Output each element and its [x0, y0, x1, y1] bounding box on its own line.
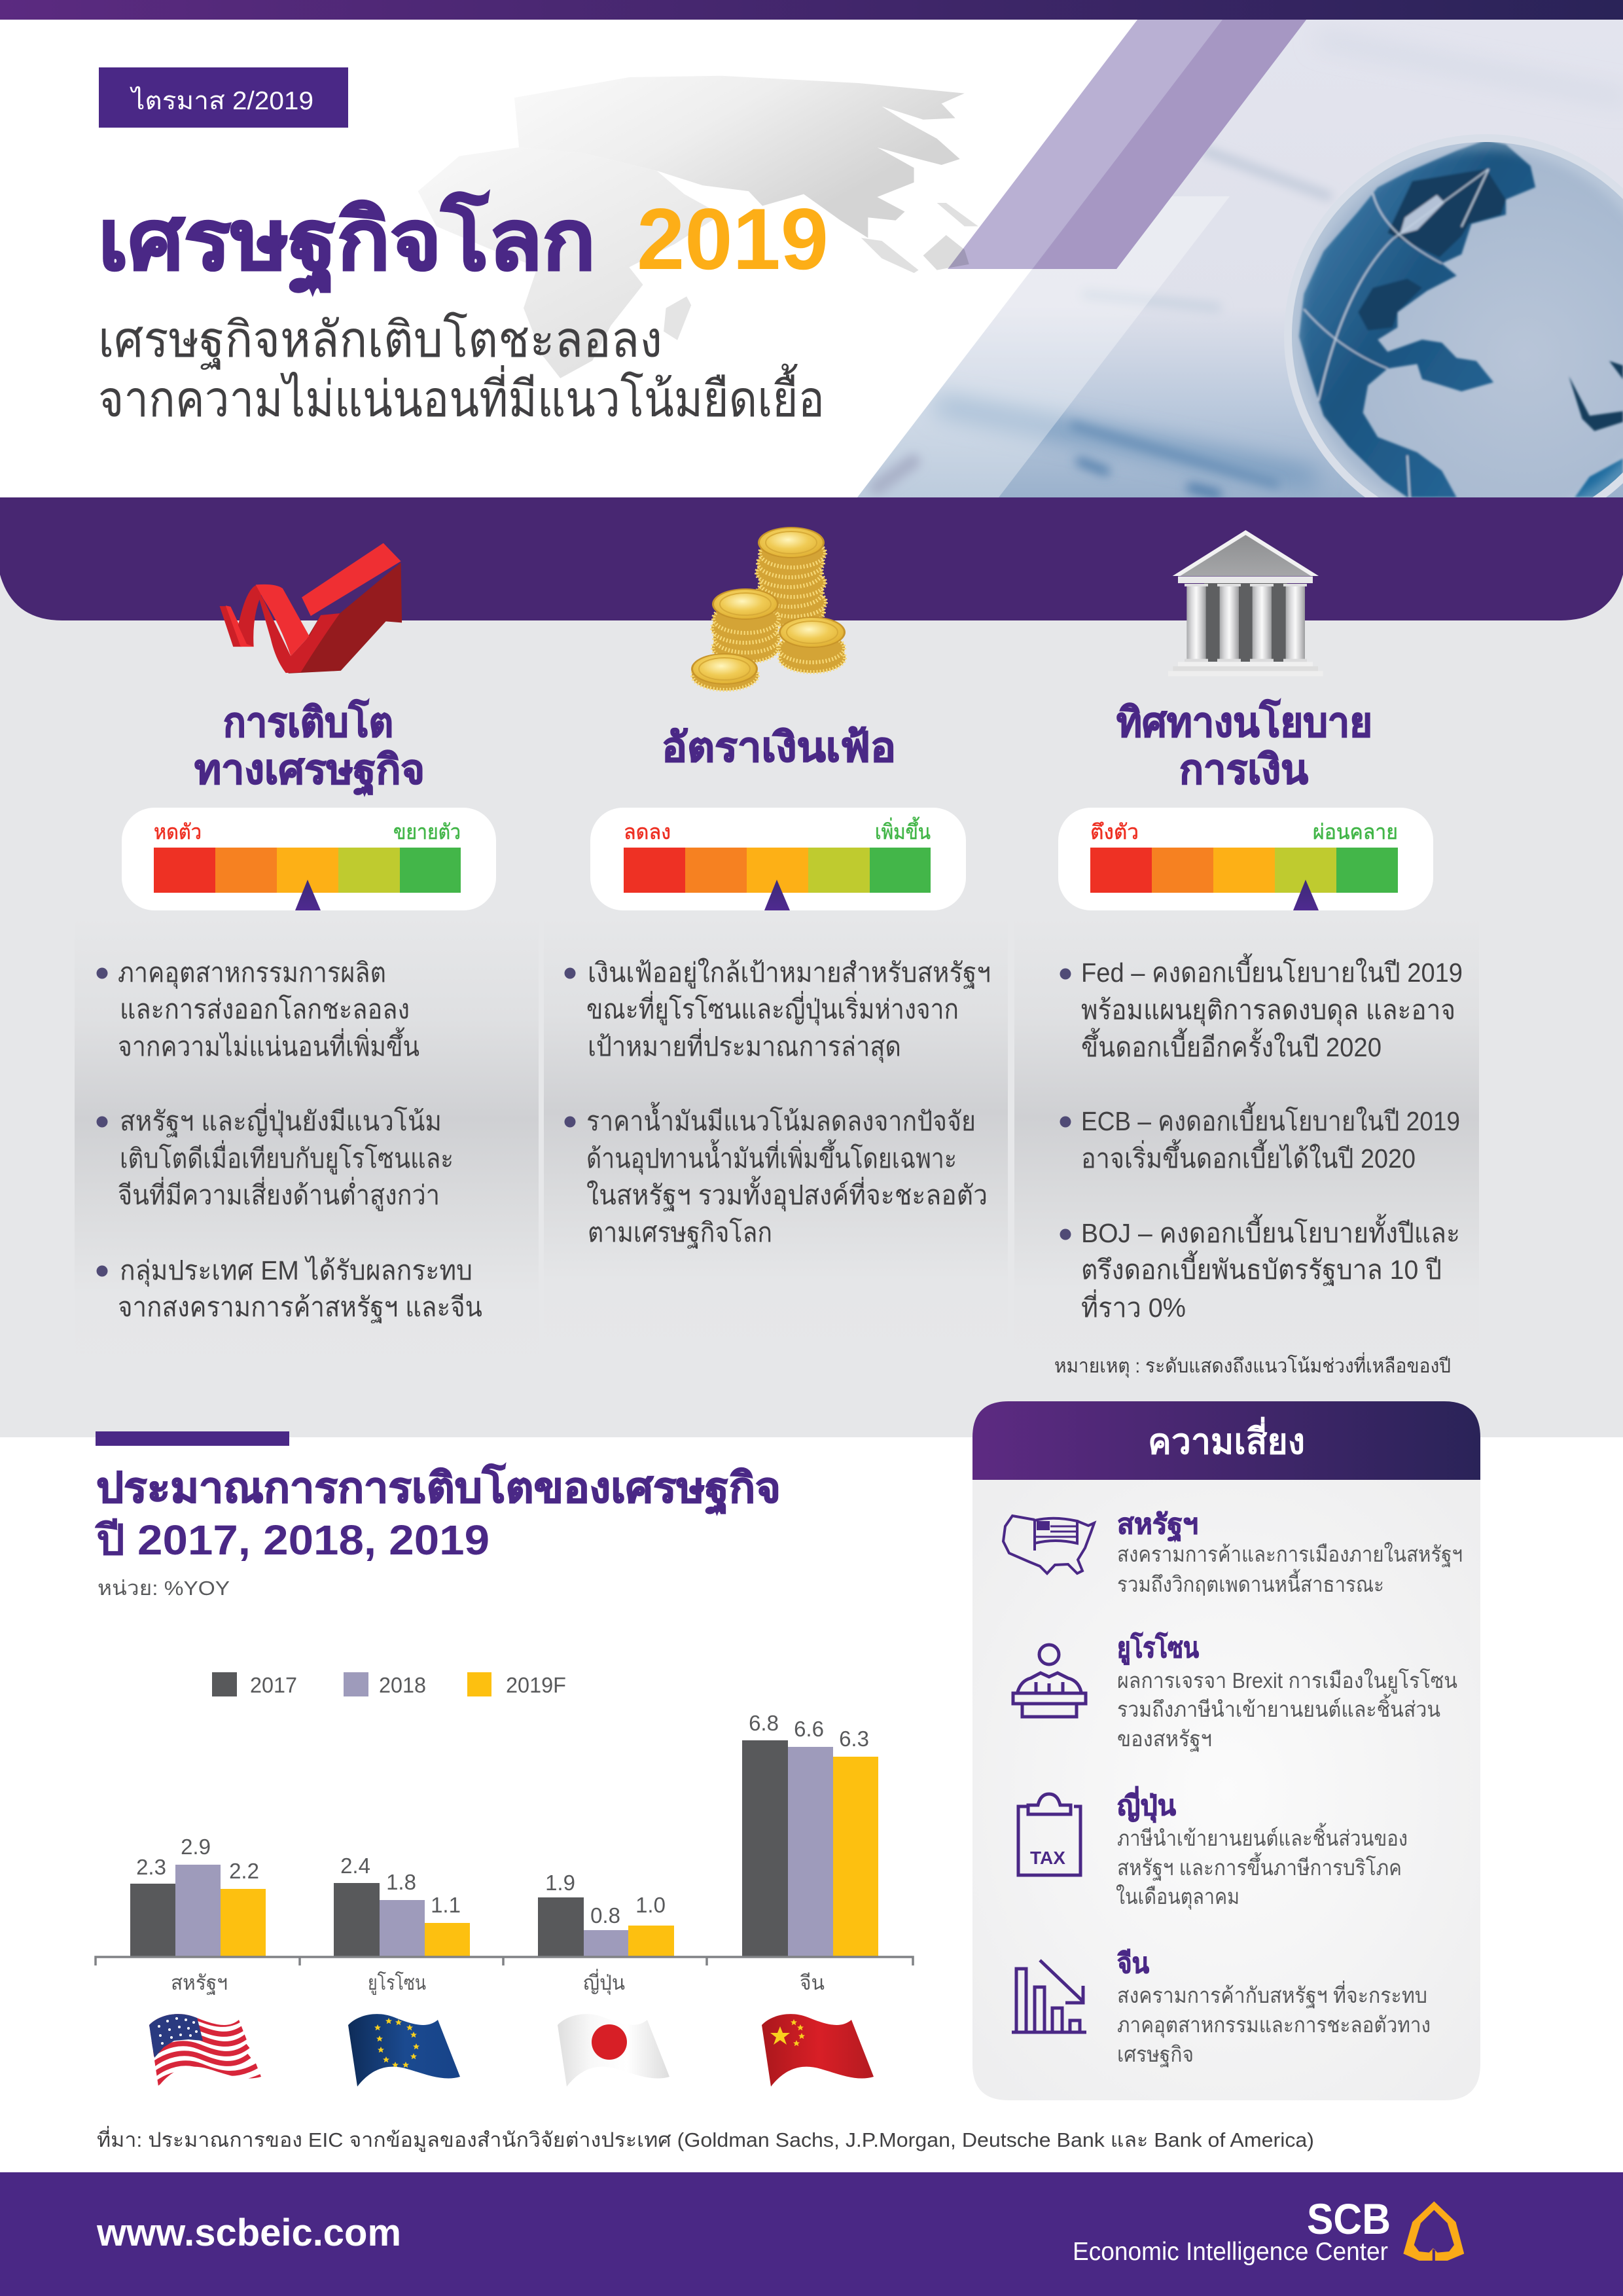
gauge: inflation: ลดลง	[624, 820, 671, 844]
category labels: จีน	[800, 1971, 825, 1994]
bars: USA	[130, 1835, 266, 1957]
quarter badge	[99, 67, 348, 128]
text block: monetary policy bullets: ตรึงดอกเบี้ยพันธบัตรรัฐบาล 10 ปี	[1081, 1250, 1442, 1286]
risk: Japan	[1018, 1786, 1408, 1910]
world map watermark	[418, 76, 978, 378]
risk: Eurozone	[1013, 1632, 1457, 1752]
icon: SCB bodhi leaf logo	[1403, 2201, 1464, 2261]
risk: USA	[1003, 1509, 1463, 1596]
subtitle	[98, 312, 825, 427]
bars: Eurozone	[334, 1854, 470, 1957]
heading: inflation: อัตราเงินเฟ้อ	[662, 725, 896, 770]
text block: growth bullets	[97, 958, 482, 1323]
heading: growth forecast	[94, 1463, 781, 1564]
text block: growth bullets: จีนที่มีความเสี่ยงด้านต่ำสูงกว่า	[118, 1177, 440, 1211]
gauge: monetary policy	[1058, 808, 1433, 910]
footer	[0, 2172, 1623, 2296]
category labels: ญี่ปุ่น	[583, 1969, 625, 1996]
icon: tax clipboard	[1018, 1794, 1080, 1875]
risk: China	[1012, 1948, 1431, 2068]
bars: China: 6.8	[749, 1711, 779, 1735]
text block: inflation bullets: ตามเศรษฐกิจโลก	[588, 1217, 772, 1249]
heading: economic growth: การเติบโต	[223, 698, 393, 745]
icon: red growth arrow	[220, 543, 402, 673]
risk: Eurozone: ของสหรัฐฯ	[1117, 1727, 1212, 1752]
title: 2019	[637, 191, 829, 288]
heading: growth forecast: ปี 2017, 2018, 2019	[94, 1516, 490, 1564]
bars: Eurozone: 1.1	[431, 1893, 461, 1917]
heading: monetary policy: ทิศทางนโยบาย	[1116, 698, 1372, 745]
text block: inflation bullets: ด้านอุปทานน้ำมันที่เพิ่มขึ้นโดยเฉพาะ	[586, 1139, 957, 1175]
flag: China	[762, 2014, 874, 2087]
text block: monetary policy bullets: Fed – คงดอกเบี้ยนโยบายในปี 2019	[1081, 953, 1463, 988]
bars: Japan: 1.9	[545, 1871, 575, 1895]
icon: US map with flag	[1003, 1516, 1094, 1573]
category labels: สหรัฐฯ	[171, 1971, 228, 1995]
footer: www.scbeic.com	[96, 2212, 401, 2254]
text block: growth bullets: จากความไม่แน่นอนที่เพิ่มขึ้น	[118, 1027, 419, 1062]
logo wordmark: Economic Intelligence Center	[1073, 2238, 1388, 2266]
bars: USA: 2.2	[229, 1859, 259, 1883]
photo: globe on financial paper	[851, 20, 1623, 537]
text block: monetary policy bullets: ECB – คงดอกเบี้ยนโยบายในปี 2019	[1081, 1102, 1460, 1136]
bars: Eurozone: 2.4	[340, 1854, 370, 1878]
category labels: ยูโรโซน	[368, 1971, 426, 1995]
quarter badge: ไตรมาส 2/2019	[130, 86, 313, 115]
subtitle: จากความไม่แน่นอนที่มีแนวโน้มยืดเยื้อ	[98, 363, 825, 427]
icon: tax clipboard: TAX	[1030, 1848, 1065, 1868]
subtitle: เศรษฐกิจหลักเติบโตชะลอลง	[98, 312, 662, 370]
bars: USA: 2.3	[136, 1855, 166, 1879]
bars: Japan: 1.0	[635, 1893, 666, 1917]
legend	[212, 1672, 566, 1697]
text block: inflation bullets: ราคาน้ำมันมีแนวโน้มลดลงจากปัจจัย	[586, 1102, 976, 1136]
gauge: growth: ขยายตัว	[393, 820, 461, 844]
flag: USA	[149, 2014, 261, 2086]
risk: Japan: สหรัฐฯ และการขึ้นภาษีการบริโภค	[1117, 1852, 1402, 1881]
gauge: inflation	[590, 808, 966, 910]
text block: inflation bullets	[564, 958, 991, 1249]
heading: monetary policy: การเงิน	[1179, 747, 1308, 793]
risk: Eurozone: ผลการเจรจา Brexit การเมืองในยูโรโซน	[1117, 1668, 1457, 1694]
risk: Eurozone: ยูโรโซน	[1117, 1632, 1199, 1665]
text block: growth bullets: และการส่งออกโลกชะลอลง	[120, 994, 410, 1024]
risk: Japan: ภาษีนำเข้ายานยนต์และชิ้นส่วนของ	[1117, 1823, 1408, 1850]
text block: monetary policy bullets	[1060, 953, 1463, 1323]
heading: economic growth: ทางเศรษฐกิจ	[194, 747, 425, 796]
risk: China: สงครามการค้ากับสหรัฐฯ ที่จะกระทบ	[1117, 1981, 1427, 2009]
title: เศรษฐกิจโลก	[98, 191, 596, 295]
text block: monetary policy bullets: อาจเริ่มขึ้นดอกเบี้ยได้ในปี 2020	[1081, 1139, 1416, 1174]
logo wordmark: SCB	[1307, 2195, 1391, 2243]
text block: monetary policy bullets: ที่ราว 0%	[1081, 1289, 1186, 1323]
category labels	[171, 1969, 825, 1996]
bars: China: 6.3	[839, 1727, 869, 1751]
text block: growth bullets: ภาคอุตสาหกรรมการผลิต	[118, 958, 386, 989]
note: หมายเหตุ : ระดับแสดงถึงแนวโน้มช่วงที่เหลือของปี	[1054, 1352, 1451, 1378]
legend: 2017	[250, 1673, 297, 1697]
risk: USA: สงครามการค้าและการเมืองภายในสหรัฐฯ	[1117, 1542, 1463, 1568]
gauge: monetary policy: ผ่อนคลาย	[1313, 820, 1398, 844]
unit label: หน่วย: %YOY	[98, 1577, 230, 1600]
bars: Japan	[538, 1871, 674, 1957]
icon: central bank building	[1168, 530, 1323, 676]
bar chart	[96, 1711, 913, 1996]
logo wordmark	[1073, 2195, 1391, 2266]
gauge: inflation: เพิ่มขึ้น	[875, 817, 931, 844]
text block: growth bullets: จากสงครามการค้าสหรัฐฯ และจีน	[118, 1292, 482, 1323]
flag: Japan	[558, 2015, 669, 2087]
source note: ที่มา: ประมาณการของ EIC จากข้อมูลของสำนักวิจัยต่างประเทศ (Goldman Sachs, J.P.Morgan, Deutsche Bank และ Bank of America)	[97, 2126, 1314, 2152]
text block: monetary policy bullets: ขึ้นดอกเบี้ยอีกครั้งในปี 2020	[1081, 1028, 1382, 1062]
text block: growth bullets: เติบโตดีเมื่อเทียบกับยูโรโซนและ	[120, 1140, 454, 1175]
text block: inflation bullets: ขณะที่ยูโรโซนและญี่ปุ่นเริ่มห่างจาก	[586, 991, 959, 1026]
bars: China	[742, 1711, 878, 1957]
icon: falling bar chart	[1012, 1960, 1086, 2032]
globe	[1284, 134, 1623, 537]
risk: China: จีน	[1117, 1948, 1149, 1979]
top gradient bar	[0, 0, 1623, 20]
gauge: growth	[122, 808, 496, 910]
legend: 2018	[379, 1673, 426, 1697]
heading: monetary policy	[1116, 698, 1372, 793]
icon: gold coins	[691, 527, 846, 691]
text block: monetary policy bullets: พร้อมแผนยุติการลดงบดุล และอาจ	[1081, 995, 1455, 1026]
lavender diagonal band	[948, 20, 1306, 269]
text block: inflation bullets: เป้าหมายที่ประมาณการล่าสุด	[588, 1028, 901, 1063]
risk: China: เศรษฐกิจ	[1117, 2042, 1194, 2068]
panel: risks: ความเสี่ยง	[1148, 1416, 1305, 1462]
legend: 2019F	[506, 1673, 566, 1697]
risk: Eurozone: รวมถึงภาษีนำเข้ายานยนต์และชิ้นส่วน	[1117, 1694, 1440, 1721]
panel: three indicators background	[0, 497, 1623, 1437]
bars: USA: 2.9	[181, 1835, 211, 1859]
risk: USA: รวมถึงวิกฤตเพดานหนี้สาธารณะ	[1117, 1569, 1384, 1596]
risk: Japan: ญี่ปุ่น	[1117, 1786, 1176, 1823]
axis	[96, 1957, 913, 1965]
gauge: monetary policy: ตึงตัว	[1090, 820, 1139, 844]
text block: inflation bullets: ในสหรัฐฯ รวมทั้งอุปสงค์ที่จะชะลอตัว	[586, 1175, 988, 1211]
risk: Japan: ในเดือนตุลาคม	[1116, 1884, 1240, 1910]
heading: growth forecast: ประมาณการการเติบโตของเศรษฐกิจ	[96, 1463, 781, 1515]
risk: China: ภาคอุตสาหกรรมและการชะลอตัวทาง	[1117, 2013, 1431, 2038]
bars: Japan: 0.8	[590, 1903, 620, 1928]
text block: monetary policy bullets: BOJ – คงดอกเบี้ยนโยบายทั้งปีและ	[1081, 1213, 1460, 1248]
translucent light parallelogram	[857, 196, 1230, 497]
risk: USA: สหรัฐฯ	[1117, 1509, 1198, 1542]
flag: EU	[348, 2014, 460, 2087]
text block: growth bullets: สหรัฐฯ และญี่ปุ่นยังมีแนวโน้ม	[120, 1103, 442, 1138]
bars: Eurozone: 1.8	[386, 1870, 416, 1894]
icon: speaker at podium	[1013, 1645, 1086, 1717]
title	[98, 191, 829, 295]
panel: risks	[972, 1401, 1480, 2100]
heading: economic growth	[194, 698, 425, 796]
gauge: growth: หดตัว	[154, 820, 202, 844]
bars: China: 6.6	[794, 1717, 824, 1741]
panel: growth forecast section	[0, 1431, 1623, 2172]
panel: hero header	[99, 20, 1623, 497]
text block: growth bullets: กลุ่มประเทศ EM ได้รับผลกระทบ	[120, 1255, 473, 1287]
text block: inflation bullets: เงินเฟ้ออยู่ใกล้เป้าหมายสำหรับสหรัฐฯ	[588, 958, 991, 989]
